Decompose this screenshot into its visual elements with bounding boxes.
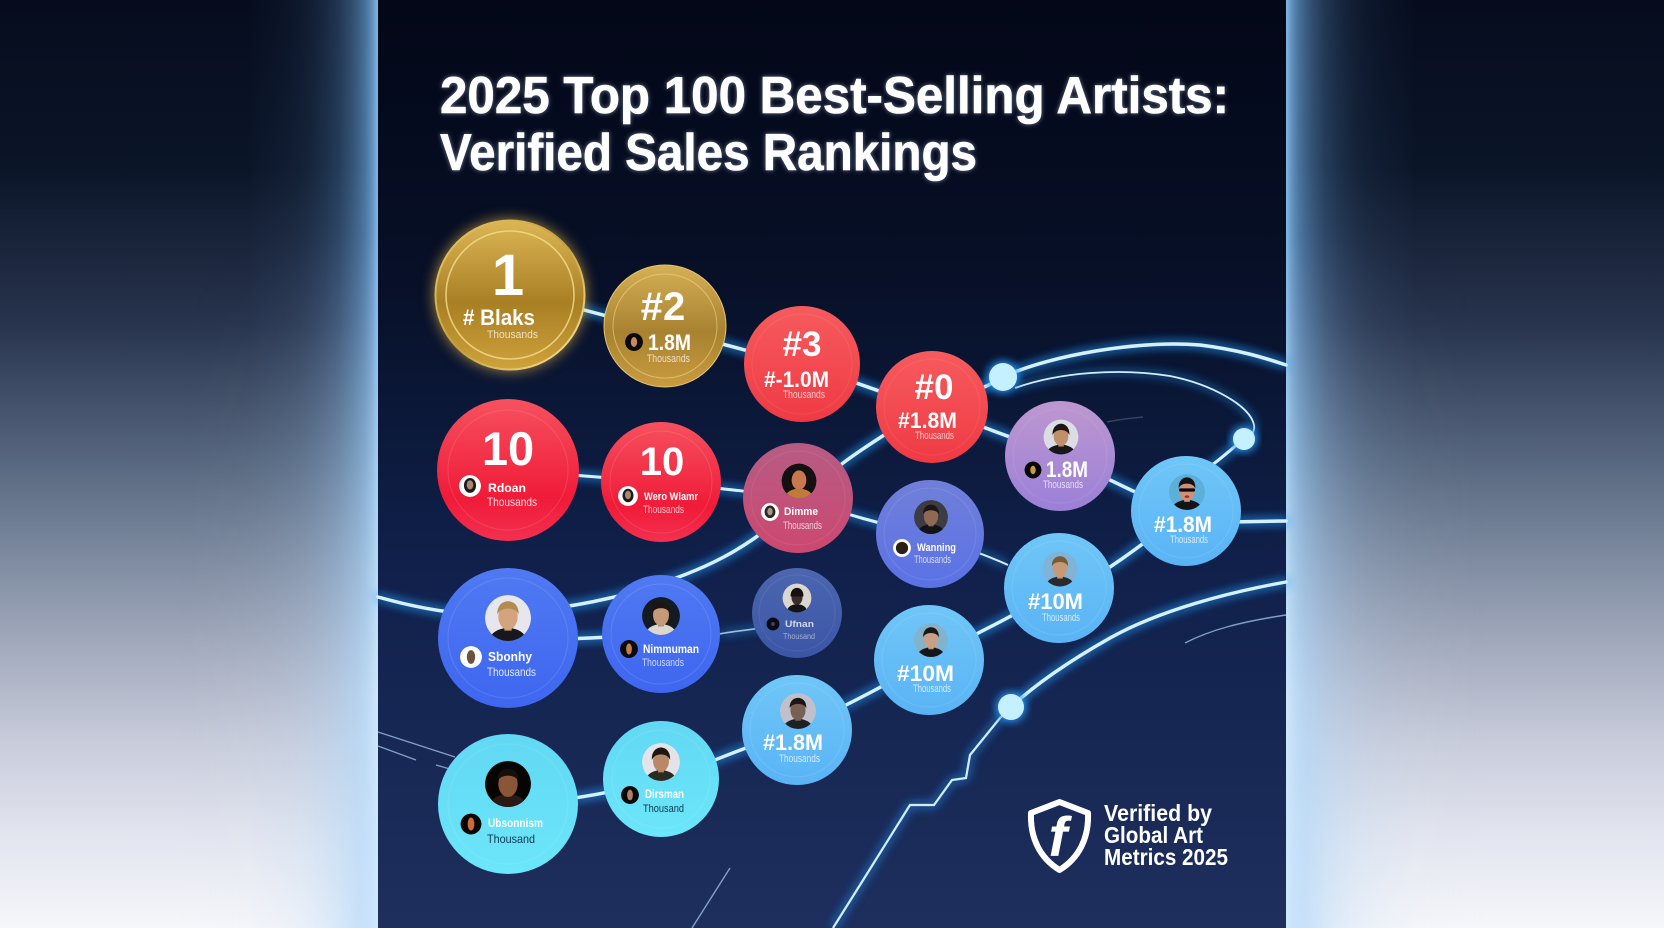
badge: cyan large portrait xyxy=(438,734,578,874)
title: Verified Sales Rankings xyxy=(440,124,977,182)
badge: #0 coral: Thousands xyxy=(915,430,954,442)
icon: shield xyxy=(1031,802,1088,870)
badge: blue medium portrait xyxy=(602,575,720,693)
badge: rank 3 coral: Thousands xyxy=(783,389,825,401)
badge: blue large portrait xyxy=(438,568,578,708)
badge: purple portrait: Thousands xyxy=(1043,479,1083,491)
badge: dim blue portrait xyxy=(752,568,842,658)
badge: sky blue right portrait: #1.8M xyxy=(1154,512,1212,537)
verified by text: Global Art xyxy=(1104,822,1203,848)
badge: red large 10 xyxy=(437,399,579,541)
badge: sky blue lower portrait: #10M xyxy=(897,661,954,686)
badge: rank 1 gold: Thousands xyxy=(487,329,538,341)
badge: red medium 10: Thousands xyxy=(643,504,684,516)
badge: dim blue portrait: Ufnan xyxy=(785,619,814,629)
badge: sky blue bottom-center portrait: #1.8M xyxy=(763,730,823,755)
portrait xyxy=(642,743,680,782)
badge: sky blue middle portrait: Thousands xyxy=(1042,612,1080,624)
badge: red medium 10: Wero Wlamr xyxy=(644,491,699,503)
portrait xyxy=(780,693,816,730)
badge: pink portrait: Dimme xyxy=(784,506,818,518)
badge: rank 3 coral: #3 xyxy=(783,325,821,364)
portrait xyxy=(914,623,948,658)
network node top xyxy=(989,363,1017,391)
portrait xyxy=(642,597,680,636)
badge: rank 3 coral: #-1.0M xyxy=(764,367,829,392)
title xyxy=(440,67,1229,182)
portrait xyxy=(1042,552,1078,587)
badge: indigo portrait xyxy=(876,480,984,588)
glowing network lines xyxy=(378,295,1286,804)
badge: sky blue middle portrait xyxy=(1004,533,1114,643)
portrait xyxy=(1044,420,1078,455)
badge: pink portrait xyxy=(743,443,853,553)
badge: sky blue bottom-center portrait: Thousands xyxy=(779,753,820,765)
portrait xyxy=(485,595,531,642)
portrait xyxy=(782,464,816,499)
badge: cyan medium portrait: Thousand xyxy=(643,803,684,815)
portrait xyxy=(1169,474,1205,511)
badge: #0 coral xyxy=(876,351,988,463)
badge: rank 2 gold: Thousands xyxy=(647,353,690,365)
portrait xyxy=(485,761,531,808)
badge: sky blue lower portrait xyxy=(874,605,984,715)
verified by text: Metrics 2025 xyxy=(1104,844,1228,870)
badge: purple portrait xyxy=(1005,401,1115,511)
badge: rank 1 gold: 1 xyxy=(492,243,524,308)
badge: rank 2 gold: 1.8M xyxy=(648,330,691,355)
title: 2025 Top 100 Best-Selling Artists: xyxy=(440,67,1229,125)
badge: indigo portrait: Wanning xyxy=(917,542,956,554)
badge: red large 10: 10 xyxy=(482,422,534,475)
badge: blue large portrait: Sbonhy xyxy=(488,649,533,664)
badge: blue medium portrait: Thousands xyxy=(642,657,684,669)
badge: cyan medium portrait xyxy=(603,721,719,837)
right background panel xyxy=(1286,0,1664,928)
badge: sky blue middle portrait: #10M xyxy=(1028,589,1083,614)
left background panel xyxy=(0,0,378,928)
thin background lines xyxy=(378,417,1286,928)
portrait xyxy=(914,500,948,535)
badge: cyan medium portrait: Dirsman xyxy=(645,787,684,801)
icon: shield: f xyxy=(1049,805,1073,868)
badge: rank 2 gold xyxy=(604,265,726,387)
badge: dim blue portrait: Thousand xyxy=(783,632,815,641)
badge: red large 10: Rdoan xyxy=(488,481,526,495)
network node bottom xyxy=(998,694,1024,720)
badge: cyan large portrait: Thousand xyxy=(487,832,535,846)
verification badge xyxy=(1031,800,1228,870)
badge: rank 2 gold: #2 xyxy=(641,285,685,329)
verified by text: Verified by xyxy=(1104,800,1212,826)
main poster panel xyxy=(378,0,1286,928)
badge: red medium 10: 10 xyxy=(640,440,684,484)
badge: blue large portrait: Thousands xyxy=(487,665,536,679)
badge: red large 10: Thousands xyxy=(487,495,537,509)
portrait xyxy=(782,584,812,613)
thin glowing lines xyxy=(719,372,1254,928)
badge: sky blue lower portrait: Thousands xyxy=(913,683,951,695)
badge: pink portrait: Thousands xyxy=(783,520,822,532)
badge: rank 1 gold xyxy=(436,220,584,370)
badge: sky blue bottom-center portrait xyxy=(742,675,852,785)
badge: purple portrait: 1.8M xyxy=(1046,457,1088,482)
badge: indigo portrait: Thousands xyxy=(914,554,951,566)
network node right xyxy=(1233,428,1255,450)
badge: sky blue right portrait xyxy=(1131,456,1241,566)
badge: rank 3 coral xyxy=(744,306,860,422)
badge: #0 coral: #0 xyxy=(915,368,953,407)
badge: #0 coral: #1.8M xyxy=(898,408,957,433)
badge: blue medium portrait: Nimmuman xyxy=(643,642,699,656)
badge: red medium 10 xyxy=(601,422,721,542)
badge: cyan large portrait: Ubsonnism xyxy=(488,816,543,830)
badge: rank 1 gold: # Blaks xyxy=(463,305,535,330)
badge: sky blue right portrait: Thousands xyxy=(1170,534,1208,546)
verified by text xyxy=(1104,800,1228,870)
